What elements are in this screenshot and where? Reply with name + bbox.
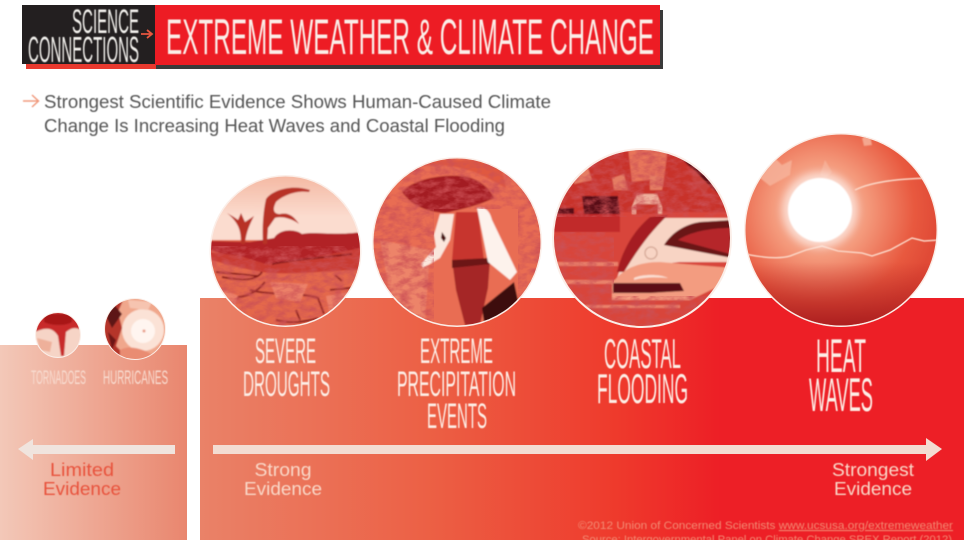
panel: strong evidence: PRECIPITATION [397,365,516,404]
panel: limited evidence [0,345,187,540]
label: limited evidence: Limited [50,460,114,480]
label: limited evidence: Evidence [43,479,121,499]
label: severe droughts [243,332,330,404]
label: limited evidence [43,460,121,499]
subheading: Strongest Scientific Evidence Shows Human-Caused Climate [44,92,551,112]
label: hurricanes: HURRICANES [103,368,168,389]
photo: coastal flooding [552,147,732,330]
panel: strong evidence [200,298,964,540]
photo: severe drought [210,175,362,330]
photo: heat waves sun [744,130,940,330]
label: strong evidence [244,460,322,499]
subheading [23,92,551,136]
label: extreme precipitation events [397,332,516,436]
panel: strong evidence: HEAT [816,329,866,382]
label: severe droughts: SEVERE [255,332,316,371]
label: extreme precipitation events: EXTREME [420,332,493,371]
panel: strong evidence: FLOODING [597,365,688,412]
icon: header arrow [141,30,152,38]
credits [578,520,953,540]
panel: strong evidence: DROUGHTS [243,365,330,404]
icon: subheading arrow [23,95,38,107]
panel: limited evidence: TORNADOES [31,368,86,389]
header banner: SCIENCE [72,3,139,41]
photo: tornado [35,312,81,358]
series label: Science Connections [28,3,139,70]
label: strong evidence: Evidence [244,479,322,499]
arrow: strong evidence [213,438,942,461]
label: strongest evidence [832,460,914,499]
header banner: CONNECTIONS [28,29,139,70]
panel: strong evidence: COASTAL [604,330,681,377]
credits: ©2012 Union of Concerned Scientists www.ucsusa.org/extremeweather [578,520,953,532]
label: strongest evidence: Strongest [832,460,914,480]
label: extreme precipitation events: EVENTS [427,397,487,436]
label: strongest evidence: Evidence [834,479,912,499]
photo: hurricane [104,298,166,362]
label: coastal flooding [597,330,688,412]
header banner [22,3,663,70]
arrow: limited evidence [18,439,175,460]
photo: extreme precipitation [372,157,542,327]
subheading: Change Is Increasing Heat Waves and Coastal Flooding [44,116,505,136]
label: heat waves [809,329,873,421]
label: strong evidence: Strong [254,460,312,480]
